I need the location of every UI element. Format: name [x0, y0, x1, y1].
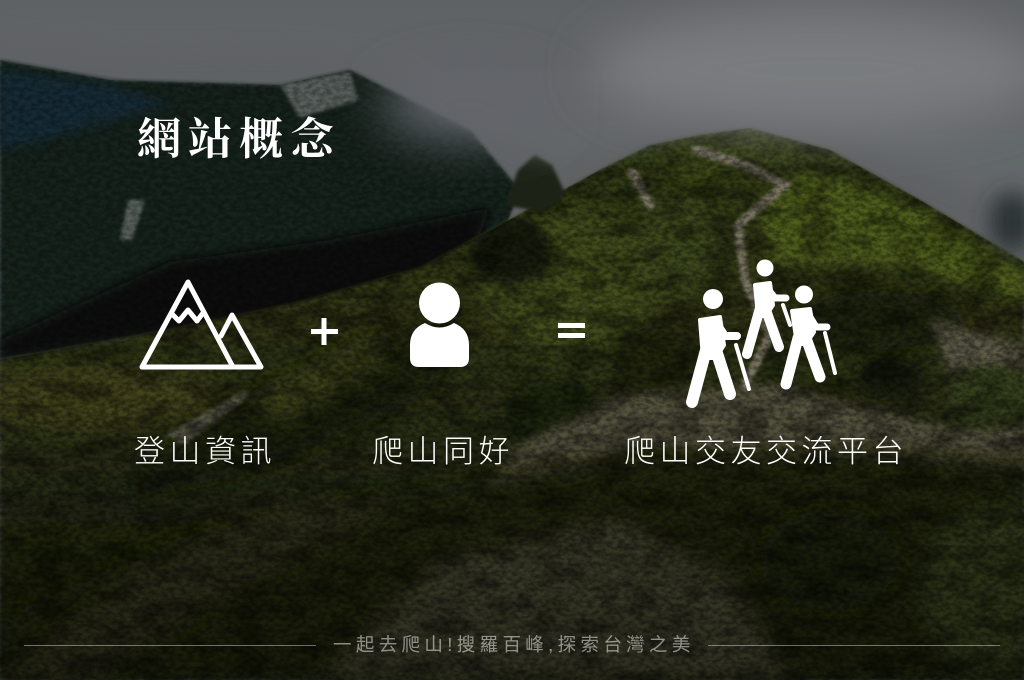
distant forest	[0, 60, 520, 360]
label: mountain information: 登山資訊	[134, 434, 276, 469]
label: hiking social platform: 爬山交友交流平台	[624, 434, 908, 469]
footer rule: right	[708, 645, 1000, 646]
fog	[0, 0, 1024, 206]
small tree on ridge	[505, 155, 566, 212]
hiker: front	[692, 289, 749, 402]
footer rule: left	[24, 645, 316, 646]
title: 網站概念	[137, 115, 341, 164]
hiker: right	[786, 286, 835, 384]
equals sign	[558, 323, 585, 338]
hiker: middle	[747, 260, 790, 354]
icon: group of hikers	[686, 260, 837, 408]
icon: mountains	[140, 280, 264, 370]
icon: person	[410, 282, 469, 367]
label: hiking friends: 爬山同好	[372, 434, 514, 469]
plus sign	[311, 318, 338, 345]
footer tagline: 一起去爬山!搜羅百峰,探索台灣之美	[333, 634, 695, 655]
